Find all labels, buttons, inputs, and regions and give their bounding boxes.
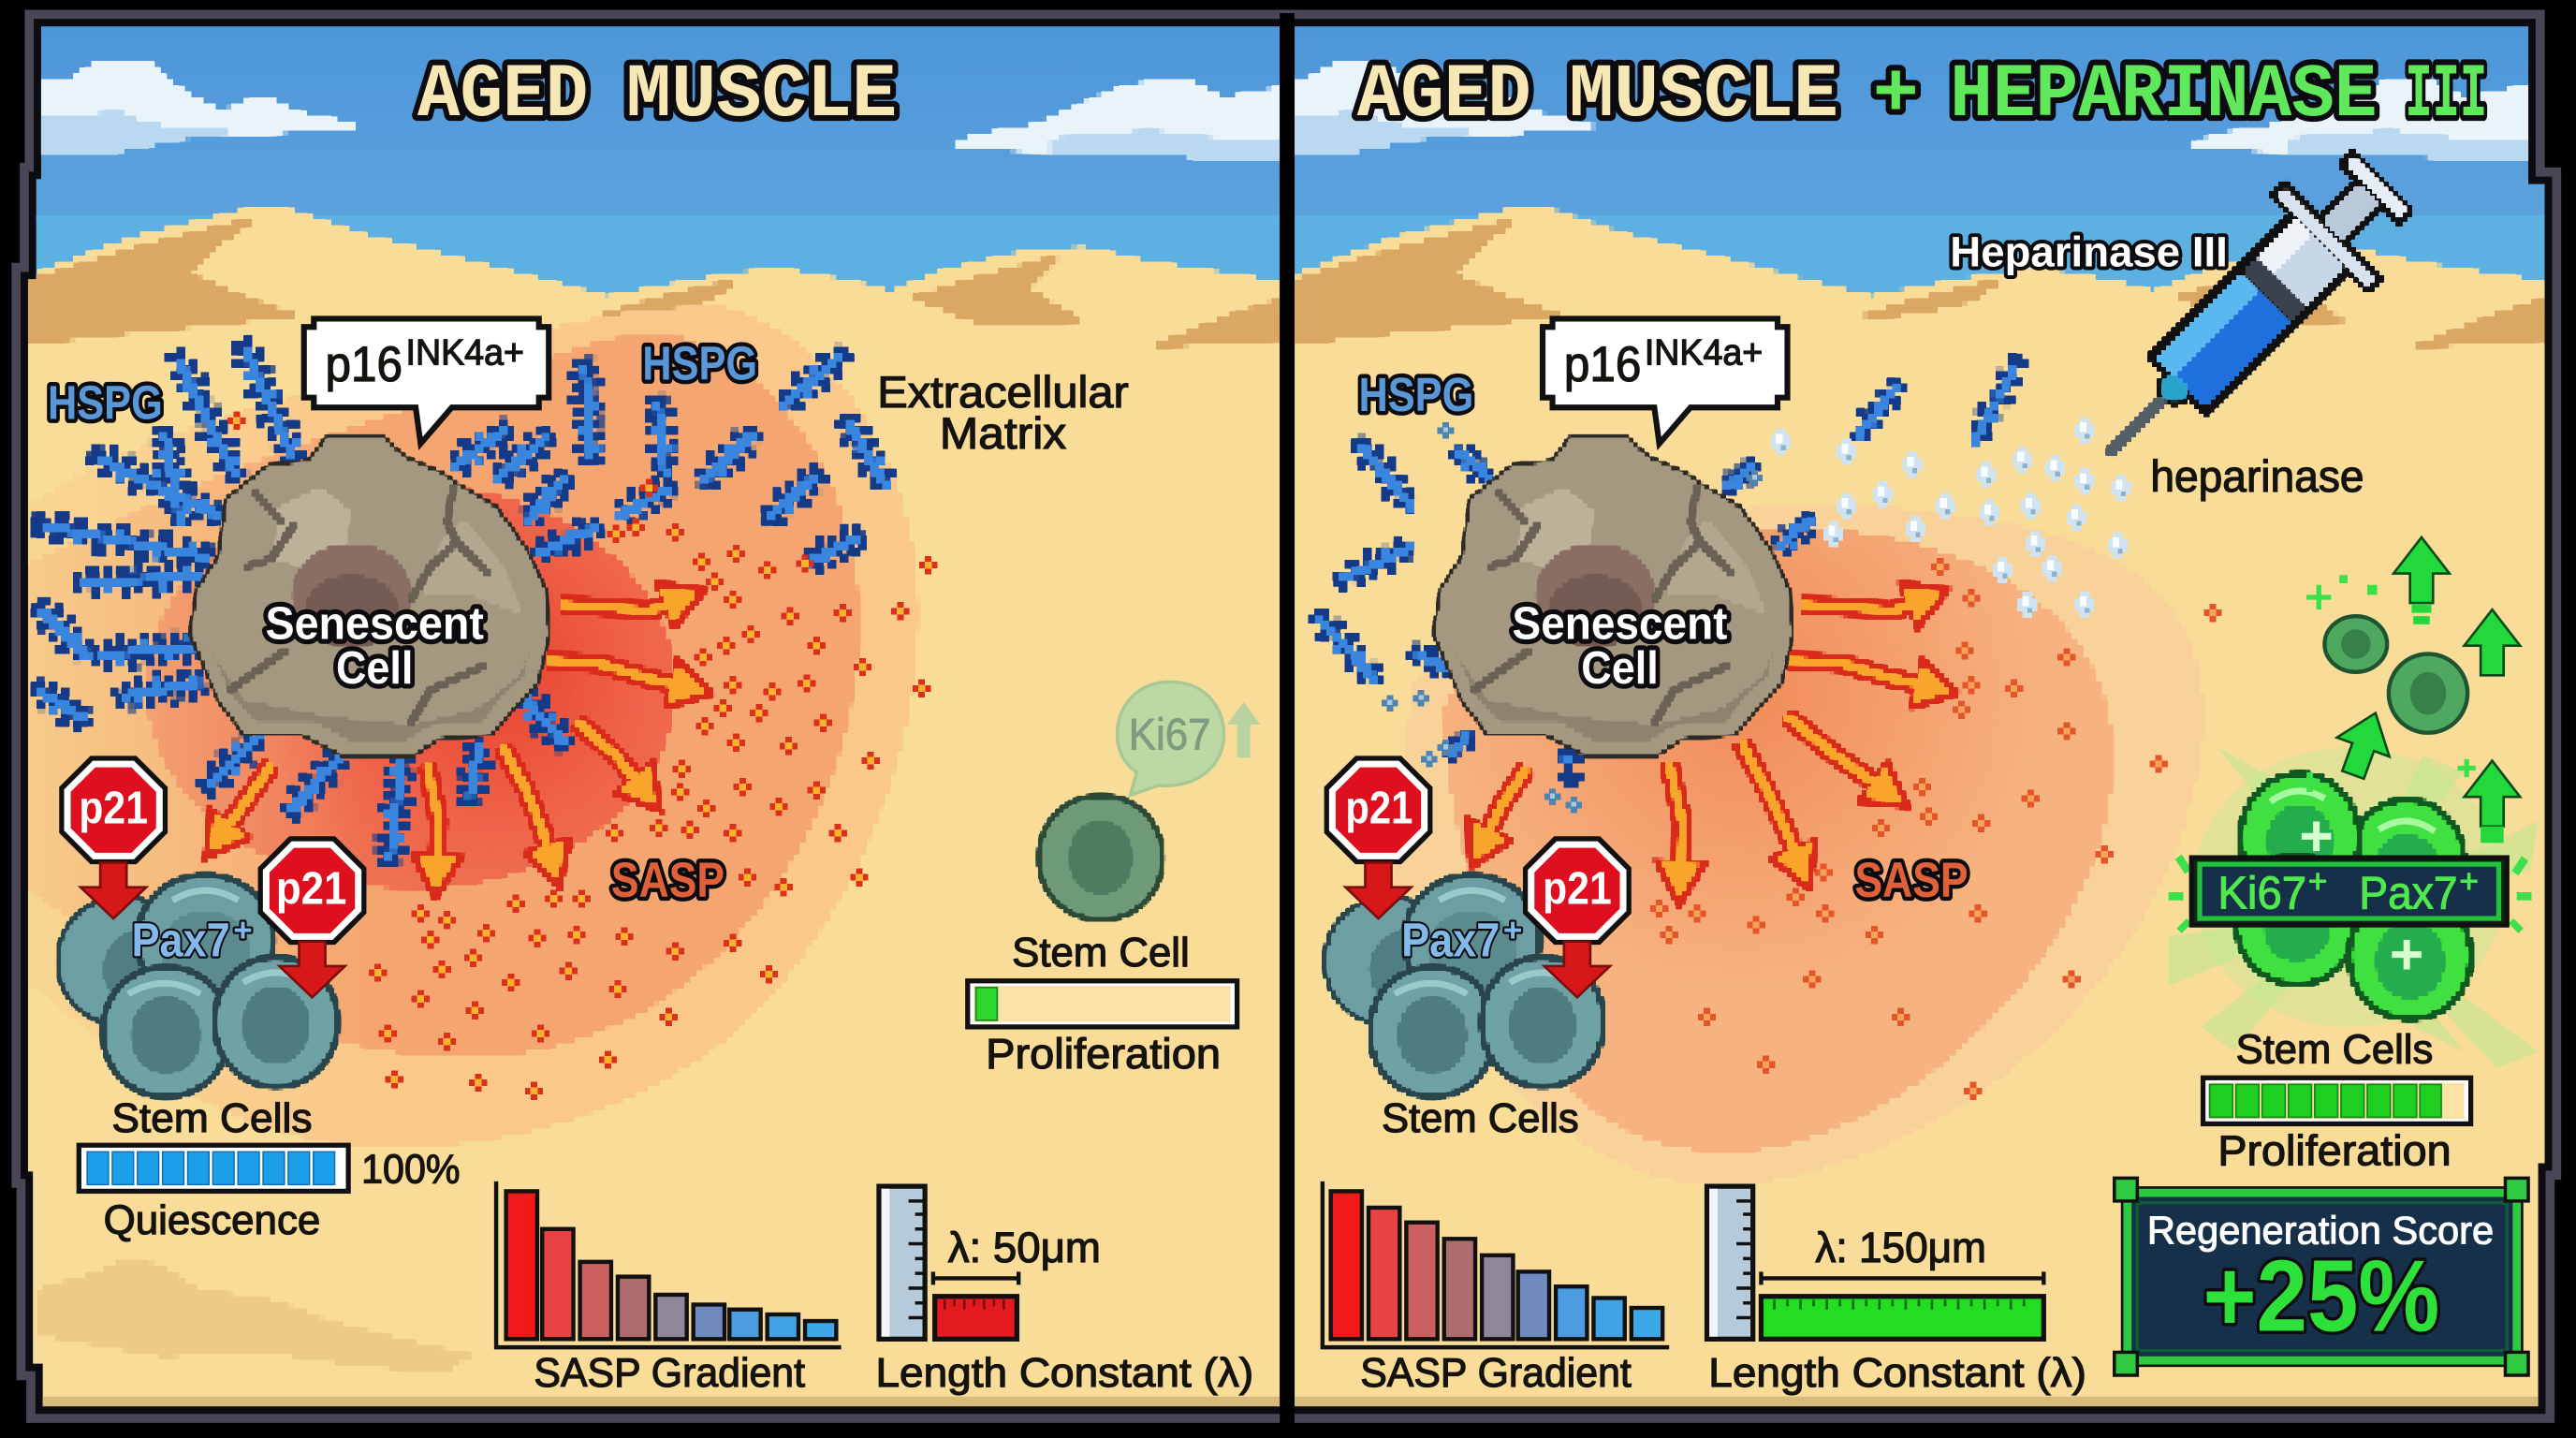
stem cell cluster <box>57 874 339 1097</box>
chart: length constant 50 <box>879 1186 1018 1339</box>
callout: p16INK4a+: INK4a+ <box>1645 333 1763 374</box>
proliferation bar high <box>2203 1078 2471 1123</box>
reduced SASP gradient <box>1397 506 2202 1184</box>
title: aged muscle: AGED <box>417 53 588 139</box>
icon: faded Ki67 bubble <box>1117 682 1260 795</box>
label: SASP: SASP <box>1854 853 1969 908</box>
p21 stop sign 1 <box>1325 756 1432 918</box>
stem cell cluster: + <box>233 913 253 949</box>
senescent cell: Cell <box>1581 643 1659 694</box>
label: HSPG right: HSPG <box>642 336 757 389</box>
title: aged muscle plus heparinase III: MUSCLE <box>1569 53 1838 139</box>
label: Proliferation: Proliferation <box>2217 1126 2452 1174</box>
activated stem cells with glow <box>2169 748 2539 1068</box>
proliferation bar low <box>968 981 1237 1027</box>
quiescence bar <box>79 1145 348 1191</box>
label: HSPG: HSPG <box>1358 368 1473 421</box>
senescent cell: Senescent <box>265 599 484 650</box>
fragmented HSPG <box>1305 352 2031 785</box>
p21 stop sign 2 <box>258 836 366 997</box>
title: aged muscle plus heparinase III: AGED <box>1357 53 1531 139</box>
HSPG fragments <box>1382 422 1763 814</box>
label: Proliferation: Proliferation <box>986 1030 1221 1078</box>
title: aged muscle plus heparinase III: HEPARINASE <box>1950 53 2378 139</box>
chart: SASP gradient <box>1323 1181 1669 1347</box>
stem cell cluster: Pax7 <box>1401 913 1500 966</box>
label: 100%: 100% <box>361 1147 460 1193</box>
label: heparinase: heparinase <box>2150 452 2364 502</box>
SASP diffusion gradient <box>0 308 916 1146</box>
inactive stem cell <box>1038 795 1164 920</box>
label: SASP Gradient: SASP Gradient <box>534 1350 805 1396</box>
stem cell cluster <box>1325 874 1605 1097</box>
label: lambda 150um: λ: 150μm <box>1815 1224 1986 1271</box>
SASP particles <box>1650 558 2222 1100</box>
stem cell cluster: Pax7 <box>131 913 230 966</box>
senescent cell: Senescent <box>1513 599 1727 650</box>
senescent cell: Cell <box>336 643 413 694</box>
proliferating cells and arrows <box>2300 537 2520 843</box>
p21 stop sign 2: p21 <box>276 863 346 914</box>
label: lambda 50um: λ: 50μm <box>948 1224 1101 1271</box>
title: aged muscle plus heparinase III: + <box>1873 53 1919 139</box>
callout: p16INK4a+ <box>1543 318 1788 444</box>
p21 stop sign 1: p21 <box>79 783 148 833</box>
label: Extracellular Matrix <box>877 368 1129 459</box>
badge: Ki67+ Pax7+: + <box>2459 863 2479 900</box>
heparinase particles <box>1771 418 2130 618</box>
label: Length Constant: Length Constant (λ) <box>1708 1350 2086 1396</box>
divider <box>1280 13 1295 1426</box>
chart: SASP gradient <box>496 1181 842 1347</box>
p21 stop sign 2: p21 <box>1543 863 1612 914</box>
label: Length Constant: Length Constant (λ) <box>875 1350 1253 1396</box>
callout: p16INK4a+: p16 <box>1564 337 1641 392</box>
label: Heparinase III: Heparinase III <box>1950 227 2228 275</box>
senescent cell <box>1438 440 1789 753</box>
p21 stop sign 2 <box>1523 836 1632 997</box>
badge: Ki67+ Pax7+: Ki67 <box>2217 869 2306 919</box>
label: Extracellular Matrix: Matrix <box>940 409 1066 459</box>
label: Extracellular Matrix: Extracellular <box>877 368 1129 418</box>
title: aged muscle plus heparinase III: III <box>2405 53 2487 139</box>
label: SASP: SASP <box>611 853 724 908</box>
title: aged muscle plus heparinase III <box>1357 53 2487 139</box>
title: aged muscle: MUSCLE <box>626 53 897 139</box>
senescent cell <box>194 440 546 753</box>
label: Stem Cells: Stem Cells <box>1382 1095 1579 1141</box>
label: SASP Gradient: SASP Gradient <box>1360 1350 1632 1396</box>
p21 stop sign 1: p21 <box>1345 783 1412 833</box>
stem cell cluster: + <box>1503 913 1522 949</box>
badge: Ki67+ Pax7+ <box>2191 858 2507 925</box>
badge: Ki67+ Pax7+: + <box>2308 863 2327 900</box>
label: Stem Cells: Stem Cells <box>111 1095 313 1141</box>
title: aged muscle <box>417 53 897 139</box>
SASP particles <box>227 412 937 1100</box>
chart: length constant 150 <box>1707 1186 2043 1339</box>
panel: aged muscle <box>0 0 1314 1430</box>
label: HSPG left: HSPG <box>48 376 163 430</box>
background: sky, sea and sand dunes <box>1206 0 2576 1430</box>
p21 stop sign 1 <box>59 756 168 918</box>
SASP arrows <box>1486 603 1922 868</box>
label: Stem Cells: Stem Cells <box>2236 1027 2433 1073</box>
badge: Ki67+ Pax7+: Pax7 <box>2359 869 2458 919</box>
callout: p16INK4a+ <box>304 318 549 444</box>
callout: p16INK4a+: p16 <box>326 337 402 392</box>
panel: regeneration score: Regeneration Score <box>2147 1209 2494 1253</box>
panel: regeneration score: +25% <box>2203 1240 2439 1354</box>
panel: aged muscle plus heparinase III <box>1206 0 2576 1430</box>
background: sky, sea and sand dunes <box>0 0 1314 1430</box>
SASP arrows <box>227 603 677 861</box>
icon: syringe <box>2060 132 2431 503</box>
icon: faded Ki67 bubble: Ki67 <box>1129 710 1211 759</box>
label: Quiescence: Quiescence <box>104 1197 320 1243</box>
HSPG fronds <box>25 335 900 868</box>
label: Stem Cell: Stem Cell <box>1012 930 1190 976</box>
panel: regeneration score <box>2115 1178 2528 1375</box>
callout: p16INK4a+: INK4a+ <box>406 333 524 374</box>
